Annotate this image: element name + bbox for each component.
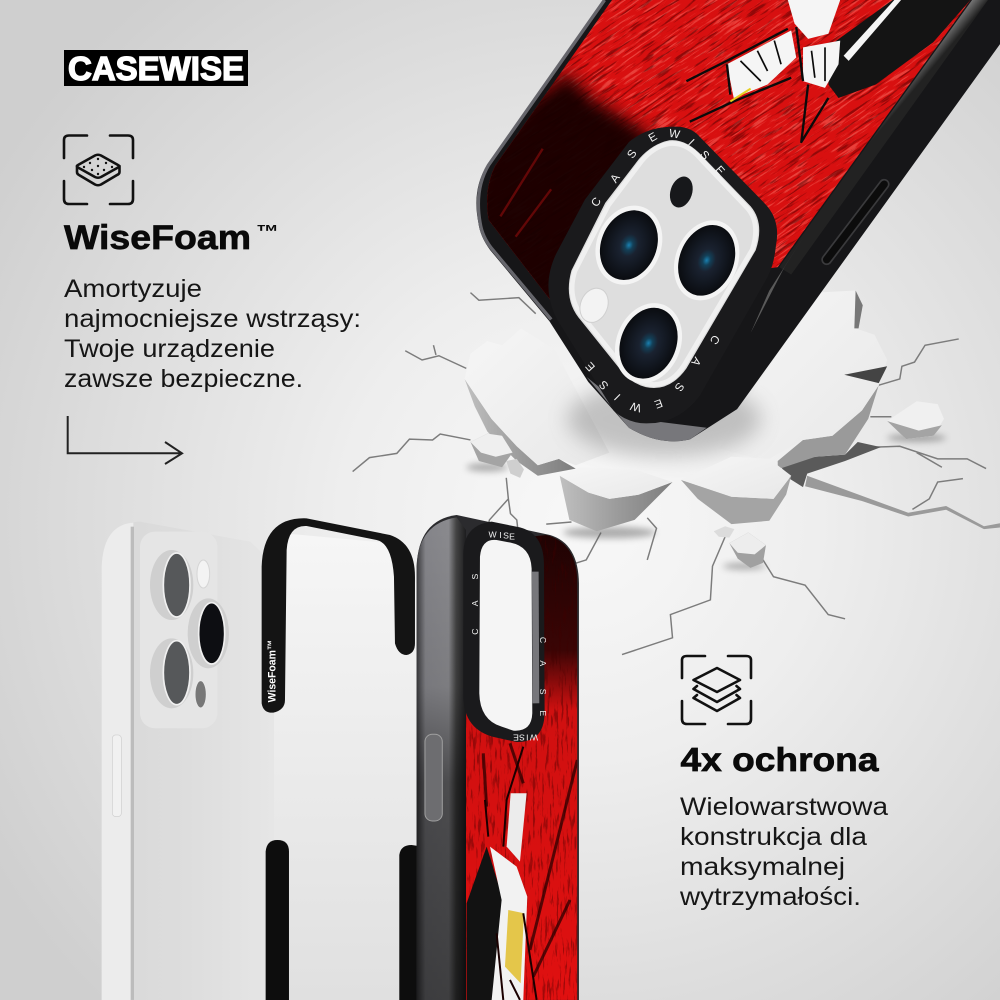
text block: 4x ochrona description: wytrzymałości. [679,883,861,911]
cracked wall [353,291,1000,655]
ring lettering: E [509,532,515,542]
lens housings [150,550,229,708]
text block: WiseFoam description: Twoje urządzenie [64,335,275,363]
camera plate [140,532,217,728]
arrow [68,416,182,464]
lens: middle [199,603,225,664]
texture: dark brush grain [466,533,579,1000]
ring lettering: W [629,399,643,414]
logo: CASEWISE: CASEWISE [68,50,244,87]
camera hole [479,540,532,731]
icon: stacked layers in frame [682,656,751,724]
shadow under phone [567,381,761,457]
ring lettering: C [470,629,480,635]
dark shaded area [487,64,660,300]
ring lettering: A [470,600,480,606]
ring highlight [525,572,546,703]
ring lettering: E [712,164,727,178]
foam lower right strip [399,845,418,1000]
ring lettering: W [529,733,538,743]
side button [425,734,442,821]
ring lettering: S [671,380,686,393]
ring lettering: C [538,637,548,643]
figure: black coat [828,0,970,98]
front-right slab [681,457,791,524]
flash [575,284,613,327]
text block: WiseFoam description: zawsze bezpieczne. [64,365,303,393]
lens: bottom [603,293,694,393]
foam lower left strip [266,840,289,1000]
ring lettering: W [668,128,681,141]
figure: outlines [485,747,537,1000]
ring lettering: E [513,733,519,743]
ring lettering [470,529,548,743]
right slab [719,291,887,469]
text block: 4x ochrona description: maksymalnej [680,853,845,881]
ring lettering: A [538,660,548,666]
lens: upper left [584,195,674,295]
foam interior panel [274,533,418,1000]
text block: 4x ochrona description [679,793,888,911]
ring lettering: E [584,359,598,373]
camera plate [569,140,759,388]
large wedge cracks [778,442,1000,529]
phone: case side view [417,515,579,1000]
ring lettering: A [608,172,623,185]
lens: bottom [163,641,190,705]
foam insert [262,518,418,1000]
ring lettering: S [697,149,711,163]
red artwork [487,0,970,300]
text block: WiseFoam description [64,275,361,393]
flash [197,560,210,588]
phone: bare white iPhone [102,522,274,1000]
ring lettering: S [503,531,509,541]
texture: dark brush grain [487,0,968,285]
sensor [195,681,206,708]
figure: white shirt [490,847,527,1000]
case shell [417,515,579,1000]
plate rim light [572,144,756,384]
heading: 4x ochrona: 4x ochrona [680,741,879,778]
ring lettering: S [519,733,525,743]
heading: WiseFoam: WiseFoam [64,219,251,257]
ring lettering: E [647,131,660,145]
ring lettering: S [625,148,640,161]
ring lettering: C [589,196,604,209]
phone: dropped case back view [476,0,1000,442]
icon: foam pad in frame [64,136,133,204]
small rock fragments [470,401,944,568]
figure: white torso and limbs [727,0,901,98]
side button [827,184,884,260]
ring lettering: I [499,530,502,540]
contact shadows [466,434,946,570]
text block: 4x ochrona description: Wielowarstwowa [680,793,888,821]
ring lettering: E [538,710,548,716]
phone body [102,522,274,1000]
ring lettering: S [470,574,480,580]
faint red glints in shadow [500,149,551,237]
texture: bright brush grain [487,0,966,300]
ring lettering: S [597,378,611,392]
figure: black coat [467,847,505,1000]
lens: top [163,553,190,617]
ring lettering: I [685,137,696,148]
ring lettering: I [526,733,528,743]
side wall shading [417,517,466,1000]
ring lettering: S [538,689,548,695]
sensor: dark dot [666,174,697,210]
side frame [102,523,133,1000]
camera ring [463,522,545,742]
figure: ink outlines [686,27,828,142]
lens: right [662,210,751,310]
left rim highlight [478,0,605,320]
foam label: WiseFoam™ [266,640,278,702]
ring lettering: W [489,529,498,539]
corner reflection [751,230,808,333]
crack lines [353,293,986,655]
figure: yellow detail [505,910,524,983]
side wall [417,517,466,1000]
dark brush strokes [483,743,577,977]
case body [476,0,1000,441]
ring lettering: I [612,391,623,402]
text block: WiseFoam description: Amortyzuje [64,275,202,303]
right edge band [779,0,988,275]
ring lettering: C [707,332,722,346]
text block: 4x ochrona description: konstrukcja dla [680,823,867,851]
text block: WiseFoam description: najmocniejsze wstrząsy: [64,305,361,333]
side button [112,735,121,817]
camera ring [548,127,777,423]
foam top strip [262,518,415,713]
heading: WiseFoam: ™ [256,222,279,243]
red artwork panel [466,533,579,1000]
ring lettering: A [688,355,703,368]
ring lettering: E [652,396,664,410]
left slab [465,328,609,476]
figure: arm [507,793,527,862]
translucent bottom corner [587,377,707,441]
front-left slab [560,467,673,531]
ring lettering [584,128,727,414]
